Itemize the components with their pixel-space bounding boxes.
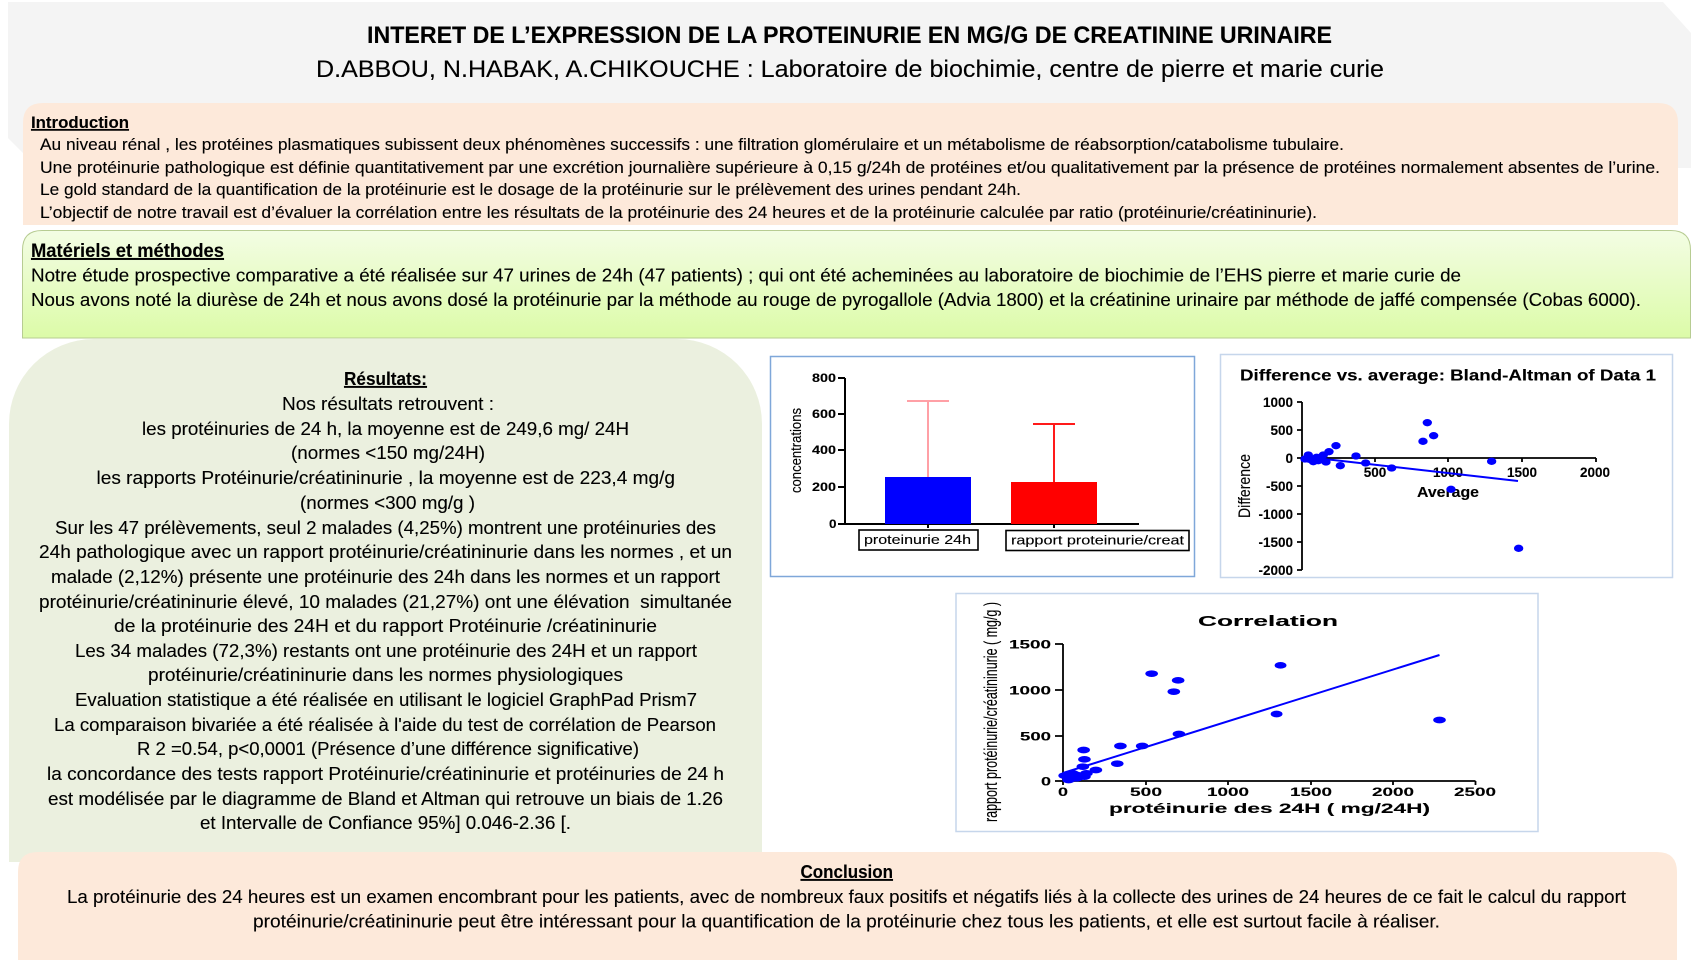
x axis labels: 1000 xyxy=(1433,465,1463,480)
y axis title: Difference xyxy=(1236,454,1254,518)
axes xyxy=(1055,644,1476,785)
y axis labels: -1500 xyxy=(1258,535,1293,550)
résultats text: Sur les 47 prélèvements, seul 2 malades (4,25%) montrent une protéinuries des xyxy=(55,517,716,538)
résultats text: La comparaison bivariée a été réalisée à l'aide du test de corrélation de Pearson xyxy=(54,714,716,735)
x axis labels: 1000 xyxy=(1207,787,1249,799)
introduction text: Au niveau rénal , les protéines plasmatiques subissent deux phénomènes successifs : une filtration glomérulaire et un métabolisme de réabsorption/catabolisme tubulaire. xyxy=(40,135,1344,154)
résultats text: et Intervalle de Confiance 95%] 0.046-2.36 [. xyxy=(200,812,571,833)
y axis labels: 1000 xyxy=(1263,395,1293,410)
résultats text: la concordance des tests rapport Protéinurie/créatininurie et protéinuries de 24 h xyxy=(47,763,724,784)
x axis labels xyxy=(1364,465,1610,480)
résultats text: protéinurie/créatininurie dans les normes physiologiques xyxy=(148,664,623,685)
x axis labels: 1500 xyxy=(1290,787,1332,799)
résultats text: Les 34 malades (72,3%) restants ont une protéinurie des 24H et un rapport xyxy=(75,640,697,661)
y axis title: rapport protéinurie/créatininurie ( mg/g ) xyxy=(981,602,1001,822)
résultats text: de la protéinurie des 24H et du rapport Protéinurie /créatininurie xyxy=(114,615,657,636)
x axis labels: 500 xyxy=(1364,465,1386,480)
header banner xyxy=(8,2,1691,168)
y axis labels: 200 xyxy=(812,482,836,494)
x axis title: Average xyxy=(1417,484,1479,501)
résultats text: malade (2,12%) présente une protéinurie des 24h dans les normes et un rapport xyxy=(51,566,720,587)
scatter chart: Bland-Altman xyxy=(1220,354,1672,578)
résultats text xyxy=(39,393,732,833)
panel: matériels et méthodes xyxy=(22,230,1690,338)
résultats text: Evaluation statistique a été réalisée en utilisant le logiciel GraphPad Prism7 xyxy=(75,689,697,710)
y axis labels: 0 xyxy=(1285,451,1293,466)
x axis labels: 500 xyxy=(1130,787,1162,799)
axes xyxy=(1297,402,1596,570)
résultats heading: Résultats: xyxy=(344,368,427,389)
conclusion text xyxy=(67,886,1626,932)
x axis labels: 2500 xyxy=(1454,787,1496,799)
y axis labels xyxy=(1258,395,1293,578)
x axis labels: 1500 xyxy=(1507,465,1537,480)
y axis labels xyxy=(1009,640,1051,788)
matériels heading: Matériels et méthodes xyxy=(31,240,224,262)
y axis labels: -500 xyxy=(1266,479,1293,494)
matériels text xyxy=(31,264,1641,310)
y axis labels: 1000 xyxy=(1009,686,1051,698)
y axis labels: 600 xyxy=(812,409,836,421)
résultats text: est modélisée par le diagramme de Bland et Altman qui retrouve un biais de 1.26 xyxy=(48,788,723,809)
x axis title: protéinurie des 24H ( mg/24H) xyxy=(1109,800,1430,816)
résultats text: R 2 =0.54, p<0,0001 (Présence d’une différence significative) xyxy=(137,738,639,759)
matériels text: Nous avons noté la diurèse de 24h et nous avons dosé la protéinurie par la méthode au rouge de pyrogallole (Advia 1800) et la créatinine urinaire par méthode de jaffé compensée (Cobas 6000). xyxy=(31,289,1641,310)
introduction text xyxy=(40,135,1660,222)
résultats text: (normes <300 mg/g ) xyxy=(300,492,475,513)
scatter chart: correlation xyxy=(956,594,1538,832)
chart title: Correlation xyxy=(1198,614,1338,630)
résultats text: protéinurie/créatininurie élevé, 10 malades (21,27%) ont une élévation simultanée xyxy=(39,591,732,612)
y axis labels xyxy=(812,373,836,531)
résultats text: 24h pathologique avec un rapport protéinurie/créatininurie dans les normes , et un xyxy=(39,541,732,562)
y axis labels: 500 xyxy=(1020,732,1051,744)
regression line xyxy=(1307,457,1518,481)
data points xyxy=(1300,419,1523,552)
résultats text: Nos résultats retrouvent : xyxy=(282,393,494,414)
y axis labels: 0 xyxy=(1041,776,1051,788)
y axis labels: 400 xyxy=(812,445,836,457)
title: INTERET DE L’EXPRESSION DE LA PROTEINURIE EN MG/G DE CREATININE URINAIRE xyxy=(367,22,1332,49)
category label 2 xyxy=(1006,530,1189,550)
bar: rapport protéinurie/créatinine xyxy=(1011,424,1097,524)
résultats text: les protéinuries de 24 h, la moyenne est de 249,6 mg/ 24H xyxy=(142,418,629,439)
regression line xyxy=(1063,655,1440,773)
axes xyxy=(838,378,1139,528)
y axis labels: 500 xyxy=(1270,423,1293,438)
category label 2: rapport proteinurie/creat xyxy=(1011,532,1184,548)
chart title: Difference vs. average: Bland-Altman of Data 1 xyxy=(1240,368,1656,384)
y axis labels: 800 xyxy=(812,373,836,385)
y axis labels: 0 xyxy=(829,519,836,531)
authors: D.ABBOU, N.HABAK, A.CHIKOUCHE : Laboratoire de biochimie, centre de pierre et marie curie xyxy=(316,56,1384,83)
conclusion heading: Conclusion xyxy=(800,861,893,882)
data points xyxy=(1058,662,1446,783)
category label 1 xyxy=(859,530,978,550)
y axis labels: -2000 xyxy=(1258,563,1293,578)
introduction text: L’objectif de notre travail est d’évaluer la corrélation entre les résultats de la protéinurie des 24 heures et de la protéinurie calculée par ratio (protéinurie/créatininurie). xyxy=(40,203,1317,222)
conclusion text: La protéinurie des 24 heures est un examen encombrant pour les patients, avec de nombreux faux positifs et négatifs liés à la collecte des urines de 24 heures de ce fait le calcul du rapport xyxy=(67,886,1626,907)
x axis labels xyxy=(1058,787,1496,799)
introduction text: Une protéinurie pathologique est définie quantitativement par une excrétion journalière supérieure à 0,15 g/24h de protéines et/ou qualitativement par la présence de protéines normalement absentes de l’urine. xyxy=(40,158,1660,177)
x axis labels: 2000 xyxy=(1372,787,1414,799)
panel: introduction xyxy=(23,103,1678,225)
résultats text: (normes <150 mg/24H) xyxy=(291,442,485,463)
category label 1: proteinurie 24h xyxy=(864,532,971,547)
bar chart: concentrations xyxy=(770,356,1194,576)
panel: résultats xyxy=(9,339,762,862)
y axis title: concentrations xyxy=(788,408,805,493)
x axis labels: 2000 xyxy=(1580,465,1610,480)
résultats text: les rapports Protéinurie/créatininurie , la moyenne est de 223,4 mg/g xyxy=(96,467,675,488)
introduction text: Le gold standard de la quantification de la protéinurie est le dosage de la protéinurie sur le prélèvement des urines pendant 24h. xyxy=(40,180,1021,199)
bar: protéinurie 24h xyxy=(885,401,971,524)
panel: conclusion xyxy=(18,852,1677,960)
conclusion text: protéinurie/créatininurie peut être intéressant pour la quantification de la protéinurie chez tous les patients, et elle est surtout facile à réaliser. xyxy=(253,910,1440,932)
x axis labels: 0 xyxy=(1058,787,1068,799)
matériels text: Notre étude prospective comparative a été réalisée sur 47 urines de 24h (47 patients) ; qui ont été acheminées au laboratoire de biochimie de l’EHS pierre et marie curie de xyxy=(31,264,1461,286)
y axis labels: 1500 xyxy=(1009,640,1051,652)
y axis labels: -1000 xyxy=(1258,507,1293,522)
introduction heading: Introduction xyxy=(31,113,129,132)
